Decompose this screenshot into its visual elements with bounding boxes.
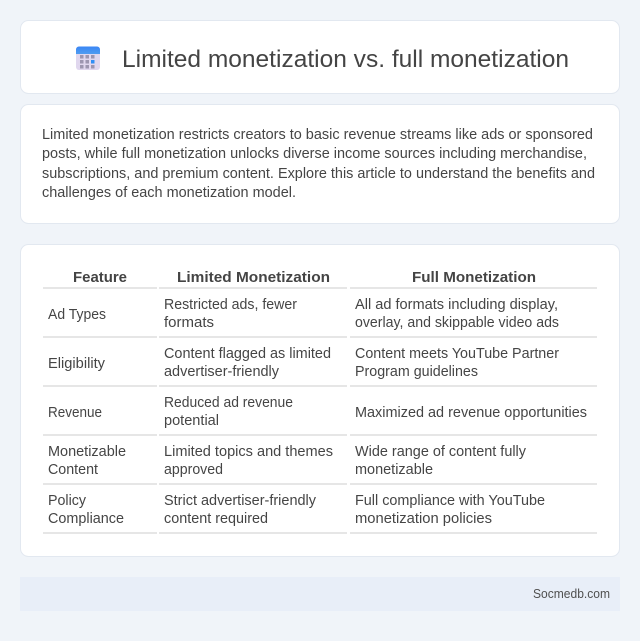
row: eligibility: Content flagged as limited xyxy=(164,346,331,362)
row: policy compliance: Strict advertiser-friendly xyxy=(164,493,317,509)
row: ad types: Restricted ads, fewer xyxy=(164,297,297,313)
intro text: posts, while full monetization unlocks diverse income sources including merchandise, xyxy=(42,146,587,162)
footer xyxy=(20,577,620,611)
row: ad types: overlay, and skippable video ads xyxy=(355,315,559,331)
row: ad types xyxy=(43,297,597,337)
row: eligibility: advertiser-friendly xyxy=(164,364,280,380)
footer credit: Socmedb.com xyxy=(533,587,610,601)
row: monetizable content: Limited topics and themes xyxy=(164,444,333,460)
row: revenue: Maximized ad revenue opportunities xyxy=(355,405,587,421)
row: policy compliance xyxy=(43,493,597,533)
panel: title card xyxy=(20,20,620,94)
row: monetizable content: Wide range of content fully xyxy=(355,444,527,460)
intro text xyxy=(42,127,595,201)
row: revenue xyxy=(43,395,597,435)
table header: Feature xyxy=(73,270,127,286)
intro text: subscriptions, and premium content. Explore this article to understand the benefits and xyxy=(42,166,595,182)
table header xyxy=(43,270,597,288)
row: policy compliance: monetization policies xyxy=(355,511,492,527)
row: monetizable content: monetizable xyxy=(355,462,433,478)
row: eligibility: Program guidelines xyxy=(355,364,478,380)
row: policy compliance: Full compliance with YouTube xyxy=(355,493,545,509)
panel: introduction xyxy=(20,104,620,224)
row: policy compliance: Compliance xyxy=(48,511,124,527)
table header: Limited Monetization xyxy=(177,270,330,286)
row: ad types: formats xyxy=(164,315,214,331)
row: eligibility xyxy=(43,346,597,386)
row: policy compliance: content required xyxy=(164,511,268,527)
intro text: challenges of each monetization model. xyxy=(42,185,296,201)
row: monetizable content xyxy=(43,444,597,484)
icon: calendar xyxy=(76,46,100,70)
row: revenue: Reduced ad revenue xyxy=(164,395,293,411)
title: Limited monetization vs. full monetization xyxy=(122,46,569,73)
row: eligibility: Content meets YouTube Partner xyxy=(355,346,559,362)
row: monetizable content: Monetizable xyxy=(48,444,126,460)
row: ad types: Ad Types xyxy=(48,307,106,323)
row: revenue: Revenue xyxy=(48,405,102,421)
row: revenue: potential xyxy=(164,413,219,429)
intro text: Limited monetization restricts creators to basic revenue streams like ads or sponsored xyxy=(42,127,593,143)
row: ad types: All ad formats including display, xyxy=(355,297,558,313)
table header: Full Monetization xyxy=(412,270,536,286)
row: policy compliance: Policy xyxy=(48,493,87,509)
panel: comparison table xyxy=(20,244,620,556)
row: eligibility: Eligibility xyxy=(48,356,106,372)
row: monetizable content: Content xyxy=(48,462,98,478)
row: monetizable content: approved xyxy=(164,462,223,478)
